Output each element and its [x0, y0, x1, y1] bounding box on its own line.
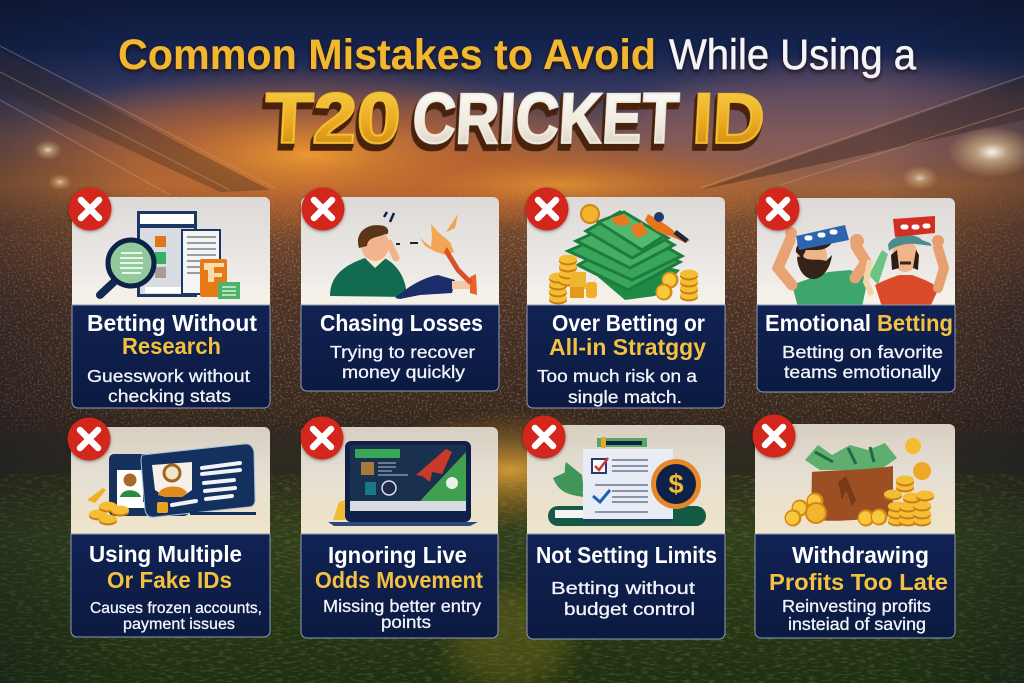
dollar glyph: $ [668, 469, 684, 499]
description: Betting without [551, 578, 695, 598]
description [323, 596, 481, 632]
title line 1: Common Mistakes to Avoid [118, 31, 656, 79]
icon: red cross badge [302, 188, 344, 230]
description [782, 596, 931, 634]
description: money quickly [342, 362, 465, 382]
card: emotional betting [756, 188, 955, 392]
heading: Over Betting or [552, 310, 705, 336]
description: insteiad of saving [788, 614, 926, 634]
description: Trying to recover [330, 342, 475, 362]
icon: frustrated man with falling arrow [330, 212, 477, 299]
highlighted heading: All-in Stratggy [549, 334, 706, 360]
heading: Emotional [765, 310, 871, 336]
icon: checklist and dollar coin [548, 437, 706, 526]
icon: documents and magnifier [100, 211, 240, 299]
heading: Not Setting Limits [536, 542, 717, 568]
heading: Betting Without [87, 310, 257, 336]
card: multiple or fake IDs [68, 418, 270, 637]
card: over betting [526, 188, 725, 408]
description: Betting on favorite [782, 342, 943, 362]
description [537, 366, 697, 407]
icon: two cheering fans [778, 216, 944, 307]
card: not setting limits [522, 416, 725, 639]
heading: Chasing Losses [320, 310, 483, 336]
icon: laptop with odds screen [328, 441, 478, 526]
title line 2: T20 Cricket ID [263, 80, 767, 159]
title line 1: While Using a [669, 31, 916, 79]
title line 2: T20 Cricket ID: ID [691, 80, 767, 159]
description: checking stats [108, 386, 231, 406]
highlighted heading: Or Fake IDs [107, 567, 232, 593]
description: Too much risk on a [537, 366, 697, 386]
description: teams emotionally [784, 362, 941, 382]
description: Guesswork without [87, 366, 250, 386]
card: chasing losses [301, 188, 499, 391]
title line 2: T20 Cricket ID: CRICKET [411, 80, 681, 159]
description: Causes frozen accounts, [90, 600, 262, 617]
icon: red cross badge [68, 418, 110, 460]
icon: red cross badge [752, 414, 796, 458]
description [782, 342, 943, 382]
heading: Ignoring Live [328, 542, 467, 568]
icon: red cross badge [68, 188, 112, 230]
icon: red cross badge [522, 416, 566, 458]
card: withdrawing profits too late [752, 414, 955, 638]
icon: ID cards and coins [87, 444, 256, 526]
icon: stack of cash and coins [549, 205, 698, 304]
description: payment issues [123, 616, 235, 633]
highlighted heading: Odds Movement [315, 567, 483, 593]
description: points [381, 612, 431, 632]
highlighted heading: Betting [877, 310, 953, 336]
description [90, 600, 262, 633]
heading: Using Multiple [89, 541, 242, 567]
description [330, 342, 475, 382]
description: Reinvesting profits [782, 596, 931, 616]
card: betting without research [68, 188, 270, 408]
description: single match. [568, 387, 682, 407]
description [551, 578, 695, 619]
icon: red cross badge [756, 188, 800, 230]
icon: red cross badge [526, 188, 568, 230]
highlighted heading: Research [122, 333, 221, 359]
title line 2: T20 Cricket ID: T20 [263, 80, 403, 159]
description: Missing better entry [323, 596, 481, 616]
description: budget control [564, 599, 695, 619]
icon: red cross badge [300, 416, 344, 460]
icon: wallet with cash and coins [784, 438, 934, 526]
heading: Withdrawing [792, 542, 929, 568]
card: ignoring live odds [300, 416, 498, 638]
highlighted heading: Profits Too Late [769, 569, 948, 595]
description [87, 366, 250, 406]
